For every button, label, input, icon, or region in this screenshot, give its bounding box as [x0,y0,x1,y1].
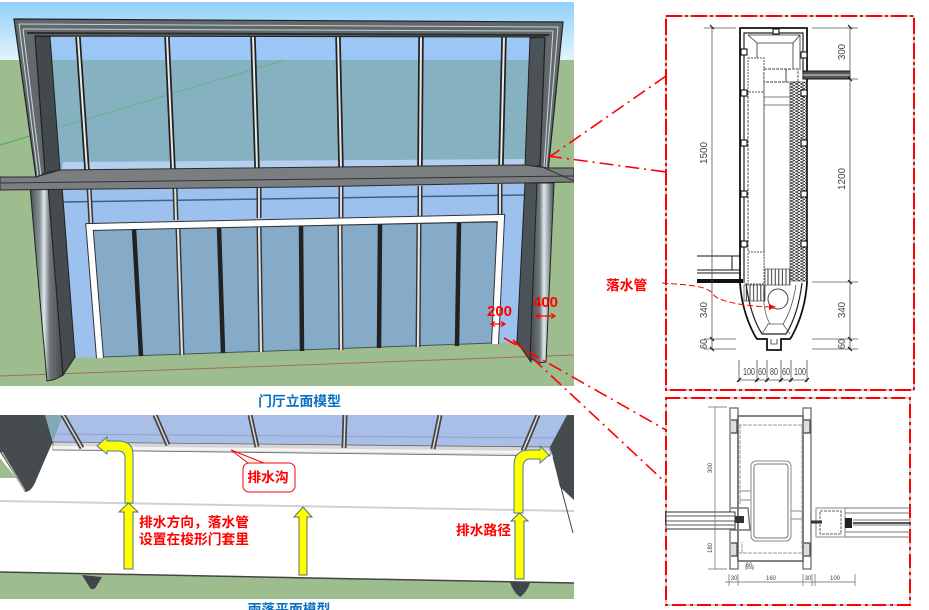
arrow: right upward [511,513,528,579]
panel: column plan detail [666,398,910,605]
green ground [0,572,574,599]
panel: canopy section detail [662,16,914,390]
inner cavity [748,58,764,92]
dimension lines [704,27,858,382]
label: drainage direction: 设置在梭形门套里 [139,531,249,547]
door frame [90,218,501,358]
upper glass [50,37,530,170]
dimension values: 30 [731,576,738,582]
dimension values [708,462,841,582]
insulation hatch [790,82,807,281]
label: drainage route: 排水路径 [456,522,511,538]
dimension values: 80 [770,366,778,378]
left dark wall [0,415,53,492]
dimension values: 340 [836,302,848,318]
right side wall and column [517,183,538,362]
dimension: 200: 200 [487,303,512,320]
left glazing [666,512,735,529]
dimension values: 100 [794,366,806,378]
label: drainage direction: 排水方向，落水管 [139,514,249,530]
gutter strip [53,442,550,456]
steel tube [751,461,791,541]
upper side walls [35,36,60,173]
dimension values: 340 [698,302,710,318]
label: downpipe: 落水管 [606,277,648,293]
arrow: right bent drain path [514,446,549,513]
window stubs [803,71,850,79]
bottom fins [82,575,102,589]
right dark wall [550,415,574,500]
lower glass [60,183,528,358]
dimension values: 60 [746,563,753,569]
elevation model render [0,2,574,386]
dimension values: 60 [782,366,790,378]
column body [730,408,738,569]
dimension values: 30 [805,576,812,582]
dimension values: 60 [698,339,710,349]
dimension values: 100 [830,576,841,582]
roof ridge line [0,500,574,512]
dimension values: 1200 [836,168,848,190]
bottom mullions [63,415,538,451]
callout: drainage gutter [231,450,295,492]
ground line [0,355,574,376]
callout: drainage gutter: 排水沟 [247,469,289,485]
clips [741,29,807,247]
dimension values: 1500 [698,142,710,164]
left side wall and column [48,186,75,375]
right window [816,508,845,537]
arrow: middle upward [294,507,312,575]
door leaves [93,222,497,357]
dimension values: 300 [708,462,714,473]
dimension values: 60 [836,339,848,349]
section outline [740,28,807,350]
roof plan model render [0,415,574,599]
dimension lines [708,407,855,586]
upper frame [14,19,563,177]
dimension: 400 [533,294,558,318]
arrow: left bent drain path [97,437,133,503]
dimension values: 60 [758,366,766,378]
canopy [0,165,574,190]
dimension: 400: 400 [533,294,558,311]
drain pipe [768,289,788,309]
dimension values: 180 [708,542,714,553]
heading: elevation model: 门厅立面模型 [258,393,341,409]
arrow: left upward [119,503,138,569]
leader lines to detail panels [504,76,666,483]
dimension values [698,44,848,378]
downpipe pointer [662,283,771,307]
upper mullions [78,37,504,170]
dimension values: 300 [836,44,848,60]
dimension values: 100 [743,366,755,378]
dimension values: 160 [766,576,777,582]
